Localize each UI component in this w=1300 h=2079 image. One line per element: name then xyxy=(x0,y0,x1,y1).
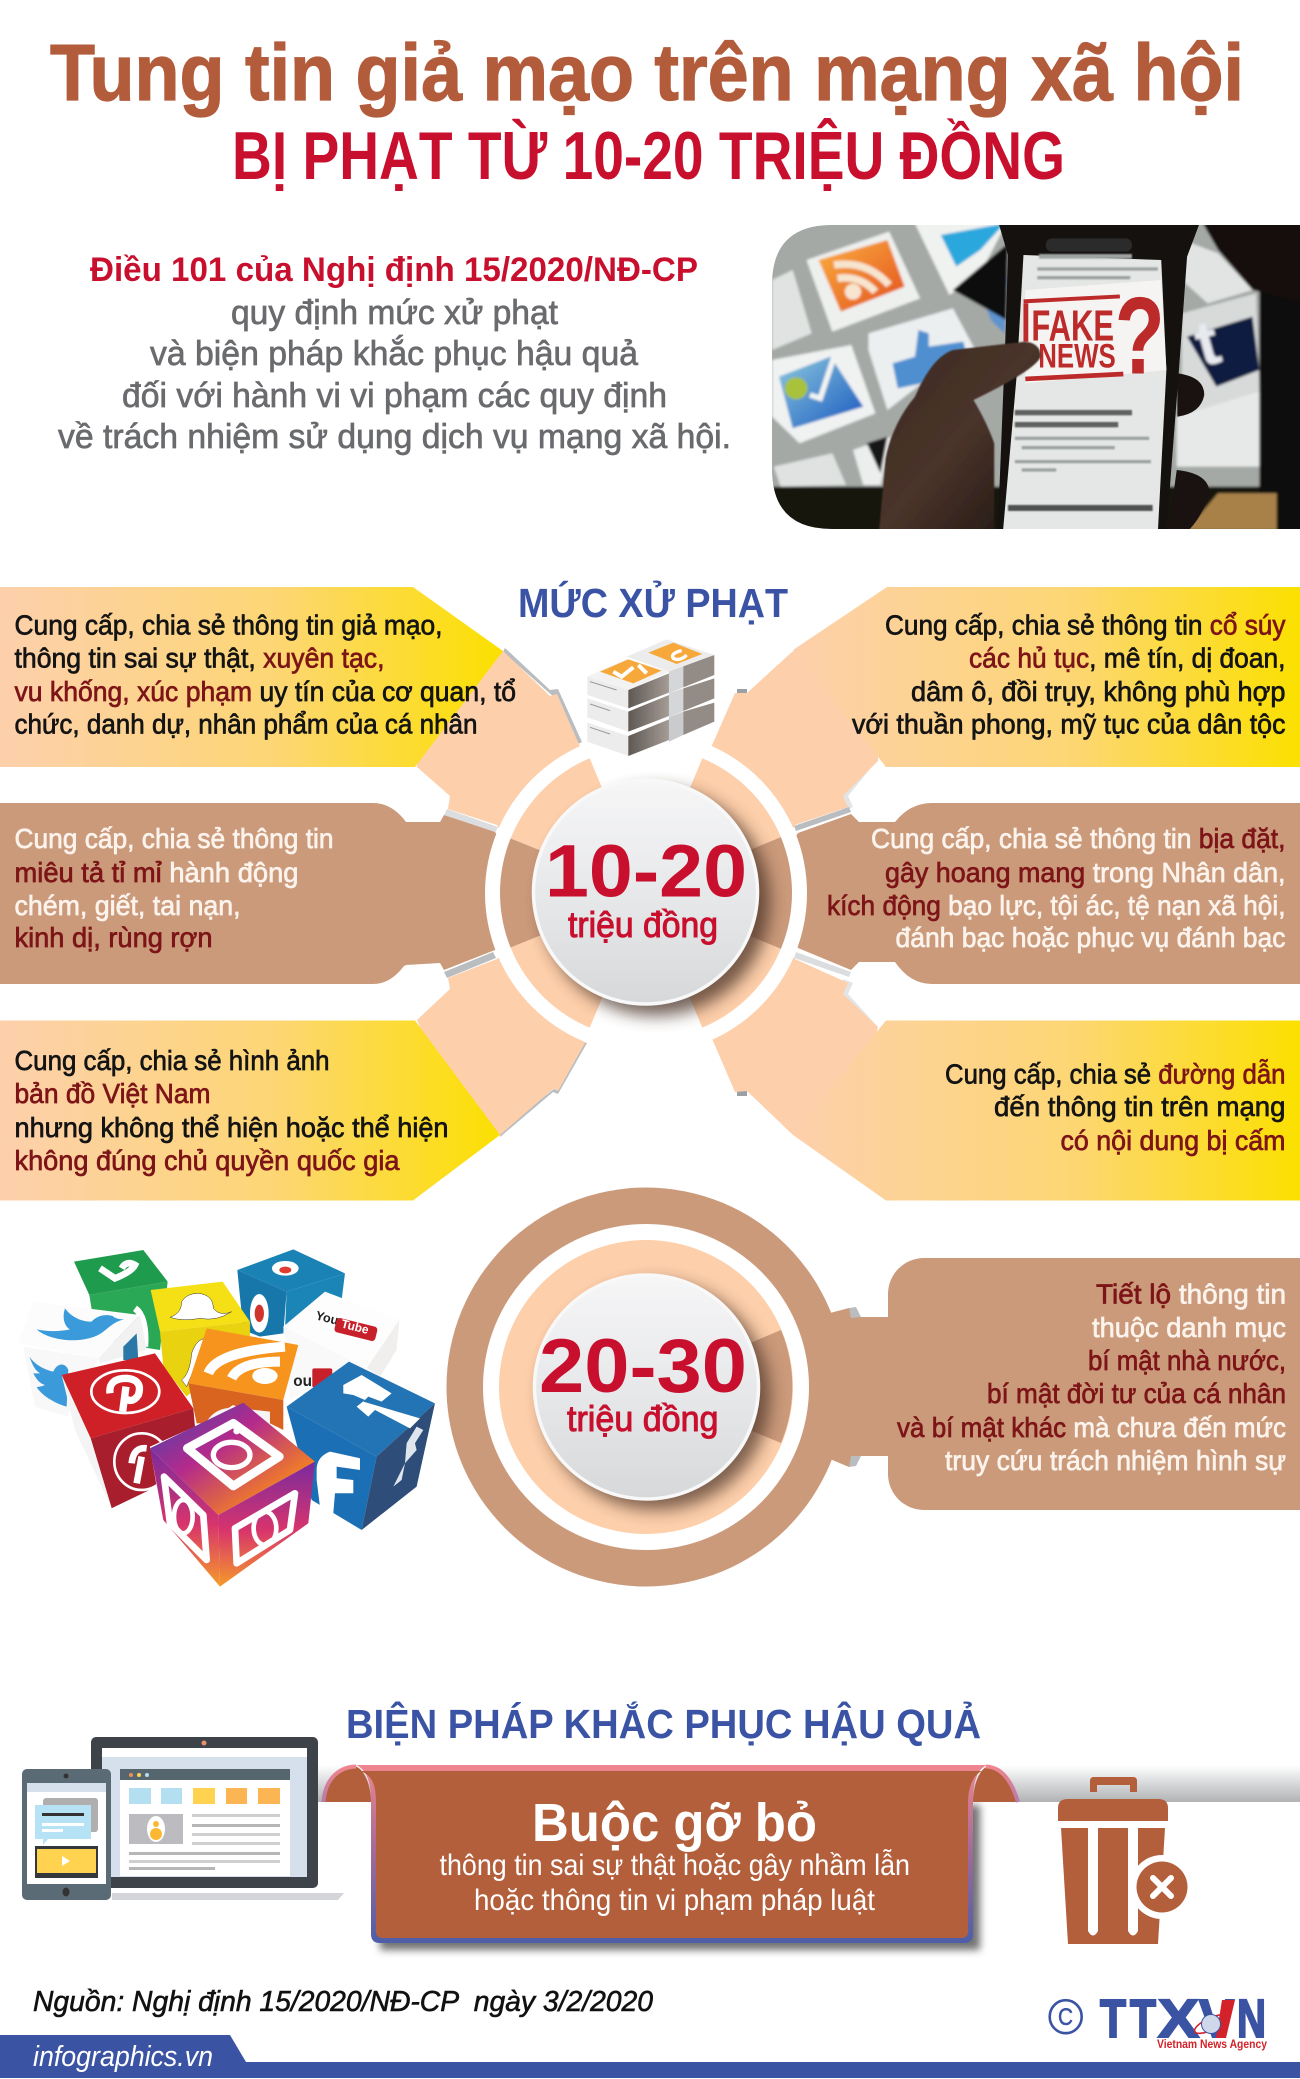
image: social media cubes xyxy=(18,1249,435,1587)
subtitle: BỊ PHẠT TỪ 10-20 TRIỆU ĐỒNG xyxy=(232,117,1065,194)
logo: TTXVN: V xyxy=(1199,1989,1234,2049)
banner: forced removal xyxy=(322,1765,1018,1950)
panel: superstition (right 1): Cung cấp, chia sẻ thông tin cổ súy xyxy=(885,610,1286,640)
badge: 10-20 million dong: triệu đồng xyxy=(568,904,718,945)
panel: state secrets: bí mật đời tư của cá nhân xyxy=(987,1378,1286,1409)
cube: youtube: ou xyxy=(293,1373,312,1390)
logo: TTXVN: C xyxy=(1058,2004,1073,2031)
cube: rss xyxy=(188,1328,298,1430)
cube: youtube: Tube xyxy=(340,1317,371,1337)
panel: map of Vietnam (left 3) xyxy=(0,1020,500,1200)
banner: forced removal: thông tin sai sự thật hoặc gây nhầm lẫn xyxy=(440,1849,910,1882)
panel: banned links (right 3): có nội dung bị cấm xyxy=(1060,1125,1286,1156)
logo: TTXVN: Vietnam News Agency xyxy=(1157,2037,1267,2051)
panel: false information (left 1) xyxy=(0,587,516,767)
logo: TTXVN: N xyxy=(1237,1989,1266,2049)
panel: gory detail (left 2): kinh dị, rùng rợn xyxy=(14,922,212,953)
stamp text xyxy=(1023,294,1160,382)
banner: forced removal: Buộc gỡ bỏ xyxy=(532,1793,817,1853)
panel: false information (left 1): chức, danh dự, nhân phẩm của cá nhân xyxy=(14,708,478,740)
icon: laptop and tablet xyxy=(22,1737,344,1900)
cube: snapchat xyxy=(151,1282,250,1397)
tablet xyxy=(22,1769,111,1900)
banner: forced removal: hoặc thông tin vi phạm pháp luật xyxy=(474,1884,876,1917)
cube: facebook xyxy=(287,1362,435,1530)
panel: gory detail (left 2): Cung cấp, chia sẻ thông tin xyxy=(14,823,334,854)
laptop xyxy=(91,1737,344,1900)
intro text block: về trách nhiệm sử dụng dịch vụ mạng xã hội. xyxy=(58,418,731,456)
panel: gory detail (left 2): chém, giết, tai nạn, xyxy=(14,890,240,921)
ribbon folds xyxy=(322,1766,1018,1802)
cube: pinterest xyxy=(62,1353,195,1508)
footer bar: infographics.vn xyxy=(33,2041,213,2073)
panel: fabrication (right 2): kích động bạo lực, tội ác, tệ nạn xã hội, xyxy=(827,890,1286,921)
stamp text: FAKE xyxy=(1031,302,1114,350)
phone body xyxy=(999,225,1199,490)
panel: superstition (right 1): các hủ tục, mê tín, dị đoan, xyxy=(969,642,1286,674)
panel: map of Vietnam (left 3): nhưng không thể hiện hoặc thể hiện xyxy=(14,1112,448,1143)
stamp text: NEWS xyxy=(1038,337,1116,375)
heading: mức xử phạt: MỨC XỬ PHẠT xyxy=(518,580,788,626)
panel: false information (left 1): Cung cấp, chia sẻ thông tin giả mạo, xyxy=(14,610,442,640)
stamp text: ? xyxy=(1115,274,1165,397)
panel: fabrication (right 2): đánh bạc hoặc phục vụ đánh bạc xyxy=(896,922,1286,953)
panel: superstition (right 1): với thuần phong, mỹ tục của dân tộc xyxy=(852,708,1286,740)
panel: state secrets: Tiết lộ thông tin xyxy=(1096,1278,1286,1310)
panel: superstition (right 1) xyxy=(793,587,1300,767)
intro text block: quy định mức xử phạt xyxy=(231,294,559,332)
intro text block xyxy=(58,251,731,456)
cube: youtube: You xyxy=(314,1309,340,1328)
panel: banned links (right 3): Cung cấp, chia sẻ đường dẫn xyxy=(945,1058,1286,1090)
photo: fake news on a phone xyxy=(772,225,1300,529)
logo: TTXVN xyxy=(1050,1989,1267,2051)
icon: stacks of money xyxy=(587,639,714,756)
panel: map of Vietnam (left 3): không đúng chủ quyền quốc gia xyxy=(14,1145,400,1176)
panel: fabrication (right 2): Cung cấp, chia sẻ thông tin bịa đặt, xyxy=(871,823,1286,854)
logo: TTXVN: X xyxy=(1158,1989,1199,2049)
cube: twitter xyxy=(18,1302,147,1417)
footer bar xyxy=(0,2035,1300,2078)
panel: state secrets: thuộc danh mục xyxy=(1092,1312,1286,1343)
badge: 10-20 million dong: 10-20 xyxy=(545,830,747,912)
panel: superstition (right 1): dâm ô, đồi trụy, không phù hợp xyxy=(911,676,1286,707)
phone screen xyxy=(1003,255,1166,533)
panel: banned links (right 3): đến thông tin trên mạng xyxy=(994,1091,1286,1122)
intro text block: và biện pháp khắc phục hậu quả xyxy=(150,335,638,373)
panel: state secrets: bí mật nhà nước, xyxy=(1088,1345,1286,1376)
source note: Nguồn: Nghị định 15/2020/NĐ-CP ngày 3/2/2020 xyxy=(33,1986,653,2018)
panel: state secrets: và bí mật khác mà chưa đến mức xyxy=(897,1412,1286,1443)
hand xyxy=(879,342,1041,533)
intro text block: Điều 101 của Nghị định 15/2020/NĐ-CP xyxy=(90,251,698,289)
cube: vine xyxy=(74,1250,168,1350)
panel: state secrets: truy cứu trách nhiệm hình sự xyxy=(945,1445,1286,1476)
panel: banned links (right 3) xyxy=(793,1020,1300,1200)
panel: state secrets xyxy=(888,1258,1300,1510)
intro text block: đối với hành vi vi phạm các quy định xyxy=(122,377,667,415)
cube: youtube xyxy=(283,1292,399,1400)
badge: 10-20 million dong xyxy=(485,746,807,1042)
cube: periscope xyxy=(237,1249,345,1337)
badge: 20-30 million dong: 20-30 xyxy=(539,1324,747,1409)
panel: fabrication (right 2) xyxy=(827,803,1300,984)
panel: gory detail (left 2): miêu tả tỉ mỉ hành động xyxy=(14,857,298,888)
badge: 20-30 million dong: triệu đồng xyxy=(567,1398,718,1439)
icon: trash bin xyxy=(1058,1777,1194,1944)
panel: false information (left 1): thông tin sai sự thật, xuyên tạc, xyxy=(14,642,384,674)
decorative band behind banner xyxy=(318,1765,1300,1802)
heading: remedial measures: BIỆN PHÁP KHẮC PHỤC HẬU QUẢ xyxy=(346,1701,981,1747)
cube: instagram xyxy=(150,1403,315,1587)
badge: 20-30 million dong xyxy=(446,1188,888,1586)
panel: map of Vietnam (left 3): bản đồ Việt Nam xyxy=(14,1078,210,1109)
panel: gory detail (left 2) xyxy=(0,803,440,984)
panel: fabrication (right 2): gây hoang mang trong Nhân dân, xyxy=(885,857,1286,888)
logo: TTXVN: T xyxy=(1130,1989,1156,2049)
panel: false information (left 1): vu khống, xúc phạm uy tín của cơ quan, tổ xyxy=(14,676,516,707)
logo: TTXVN: T xyxy=(1100,1989,1126,2049)
photo: fake news on a phone: t xyxy=(1187,306,1227,380)
panel: map of Vietnam (left 3): Cung cấp, chia sẻ hình ảnh xyxy=(14,1045,330,1076)
arrows around the first penalty xyxy=(373,648,932,1137)
